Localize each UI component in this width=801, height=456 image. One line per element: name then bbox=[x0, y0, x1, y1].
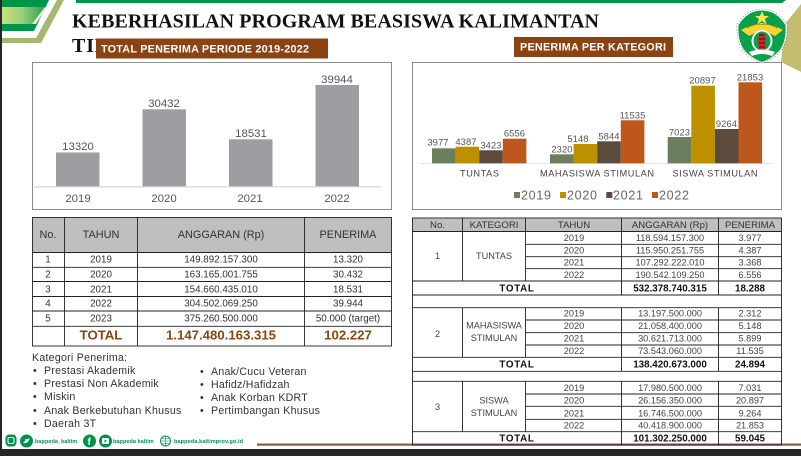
table: budget and recipients per category: 2019 bbox=[564, 233, 584, 243]
table: budget and recipients per category: 18.288 bbox=[735, 284, 766, 294]
text block: recipient categories: Daerah 3T bbox=[44, 418, 97, 430]
table: budget and recipients per category: 26.156.350.000 bbox=[638, 396, 702, 406]
table: budget and recipients per category: 2 bbox=[435, 329, 440, 339]
table: budget and recipients per category: 59.045 bbox=[735, 434, 766, 444]
table: budget and recipients per year: 2021 bbox=[90, 284, 112, 296]
table: budget and recipients per year: 2022 bbox=[90, 298, 112, 310]
bar chart: recipients per category: 6556 bbox=[504, 128, 525, 138]
heading: penerima per kategori bbox=[514, 37, 673, 57]
bar chart: total recipients per year: 2019 bbox=[65, 193, 91, 205]
table: budget and recipients per category: 532.378.740.315 bbox=[633, 284, 707, 294]
text block: recipient categories: • bbox=[200, 392, 204, 404]
table: budget and recipients per category: 5.148 bbox=[738, 321, 762, 331]
bar chart: recipients per category: 11535 bbox=[620, 110, 645, 120]
table: budget and recipients per category: 2022 bbox=[564, 270, 584, 280]
title: TIMUR bbox=[72, 35, 145, 57]
table: budget and recipients per category: 2022 bbox=[564, 420, 584, 430]
table: budget and recipients per category: 5.899 bbox=[738, 334, 762, 344]
table: budget and recipients per category: MAHASISWA bbox=[466, 320, 523, 330]
top right corner decoration bbox=[781, 4, 801, 72]
table: budget and recipients per year: 50.000 (target) bbox=[316, 314, 380, 324]
bar chart: recipients per category: 2020 bbox=[567, 188, 597, 202]
table: budget and recipients per category: ANGGARAN (Rp) bbox=[632, 220, 708, 231]
bar chart: total recipients per year: 2020 bbox=[151, 193, 177, 205]
text block: recipient categories: Anak/Cucu Veteran bbox=[211, 366, 307, 378]
table: budget and recipients per category: SISWA bbox=[479, 396, 509, 406]
bar chart: recipients per category: 2019 bbox=[521, 188, 551, 202]
table: budget and recipients per category: 2019 bbox=[564, 308, 584, 318]
table: budget and recipients per category: 30.621.713.000 bbox=[638, 334, 702, 344]
bar chart: total recipients per year: 30432 bbox=[148, 98, 180, 110]
table: budget and recipients per category: 2020 bbox=[564, 321, 584, 331]
bar chart: total recipients per year bbox=[32, 62, 392, 210]
top left corner decoration bbox=[2, 0, 64, 43]
table: budget and recipients per year: 304.502.069.250 bbox=[184, 298, 258, 310]
table: budget and recipients per year: 4 bbox=[45, 298, 51, 310]
table: budget and recipients per category: 2020 bbox=[564, 246, 584, 256]
bar chart: recipients per category: 7023 bbox=[669, 126, 690, 138]
table: budget and recipients per category: 3 bbox=[435, 402, 440, 412]
table: budget and recipients per category: 40.418.900.000 bbox=[638, 420, 702, 430]
table: budget and recipients per category: 16.746.500.000 bbox=[638, 408, 702, 418]
table: budget and recipients per year: 1 bbox=[45, 254, 51, 266]
dark bottom edge bbox=[0, 449, 801, 456]
table: budget and recipients per year: 30.432 bbox=[333, 270, 363, 280]
table: budget and recipients per category: 24.894 bbox=[735, 360, 766, 370]
table: budget and recipients per category: 11.535 bbox=[736, 346, 764, 356]
heading: total penerima: TOTAL PENERIMA PERIODE 2019-2022 bbox=[101, 43, 309, 55]
title bbox=[72, 10, 600, 57]
table: budget and recipients per category: 1 bbox=[435, 251, 440, 261]
bar chart: total recipients per year: 2022 bbox=[324, 193, 350, 205]
table: budget and recipients per year: 375.260.500.000 bbox=[184, 314, 258, 324]
table: budget and recipients per category: No. bbox=[430, 220, 445, 231]
bar chart: recipients per category: SISWA STIMULAN bbox=[672, 168, 758, 178]
table: budget and recipients per year: 5 bbox=[45, 314, 51, 324]
text block: recipient categories: • bbox=[200, 366, 204, 378]
table: budget and recipients per year: 149.892.157.300 bbox=[184, 254, 258, 266]
table: budget and recipients per category: 2021 bbox=[564, 408, 584, 418]
table: budget and recipients per year: 2020 bbox=[90, 270, 112, 280]
table: budget and recipients per category: TOTAL bbox=[499, 434, 535, 444]
text block: recipient categories: Anak Berkebutuhan Khusus bbox=[44, 405, 182, 417]
title: KEBERHASILAN PROGRAM BEASISWA KALIMANTAN bbox=[72, 10, 600, 32]
text block: recipient categories: Kategori Penerima: bbox=[32, 352, 127, 364]
bar chart: recipients per category: 3977 bbox=[427, 136, 449, 148]
table: budget and recipients per category: 21.058.400.000 bbox=[638, 321, 702, 331]
text block: recipient categories: Pertimbangan Khusus bbox=[211, 405, 320, 417]
bar chart: recipients per category: 9264 bbox=[716, 118, 737, 129]
bar chart: total recipients per year: 18531 bbox=[235, 128, 267, 140]
table: budget and recipients per category: STIMULAN bbox=[471, 333, 517, 343]
table: budget and recipients per category: 13.197.500.000 bbox=[638, 308, 702, 318]
text block: recipient categories bbox=[32, 352, 320, 430]
text block: recipient categories: • bbox=[33, 378, 37, 390]
table: budget and recipients per category: 138.420.673.000 bbox=[633, 360, 707, 370]
table: budget and recipients per year: TOTAL bbox=[80, 328, 122, 342]
table: budget and recipients per category: 2020 bbox=[564, 396, 584, 406]
table: budget and recipients per category: TUNTAS bbox=[476, 251, 512, 261]
table: budget and recipients per category: 20.897 bbox=[736, 396, 764, 406]
table: budget and recipients per category: 17.980.500.000 bbox=[638, 383, 702, 393]
table: budget and recipients per category: 107.292.222.010 bbox=[636, 258, 704, 268]
bar chart: recipients per category: 2021 bbox=[613, 188, 643, 202]
bar chart: recipients per category: 4387 bbox=[455, 136, 477, 147]
text block: recipient categories: • bbox=[33, 405, 37, 417]
table: budget and recipients per year bbox=[32, 218, 392, 346]
table: budget and recipients per category: 9.264 bbox=[738, 408, 762, 418]
table: budget and recipients per year: 102.227 bbox=[324, 328, 372, 342]
bar chart: recipients per category: 3423 bbox=[480, 140, 502, 150]
text block: recipient categories: • bbox=[200, 379, 204, 391]
table: budget and recipients per category: 21.853 bbox=[736, 420, 764, 430]
table: budget and recipients per category: 190.542.109.250 bbox=[636, 270, 704, 280]
bottom brown line bbox=[257, 444, 801, 446]
footer: social media links: f bbox=[88, 437, 92, 448]
bar chart: recipients per category: 5148 bbox=[567, 133, 589, 144]
table: budget and recipients per category: 2022 bbox=[564, 346, 584, 356]
table: budget and recipients per category: 6.556 bbox=[738, 270, 762, 280]
table: budget and recipients per category bbox=[412, 218, 782, 445]
bar chart: recipients per category: 20897 bbox=[689, 74, 716, 86]
text block: recipient categories: Hafidz/Hafidzah bbox=[211, 379, 290, 391]
table: budget and recipients per category: 2021 bbox=[564, 258, 584, 268]
bar chart: recipients per category bbox=[412, 62, 782, 210]
text block: recipient categories: Miskin bbox=[44, 391, 76, 403]
table: budget and recipients per category: 101.302.250.000 bbox=[633, 434, 707, 444]
text block: recipient categories: • bbox=[200, 405, 204, 417]
footer: social media links: bappeda kaltim bbox=[113, 439, 154, 445]
table: budget and recipients per year: 3 bbox=[45, 284, 51, 296]
table: budget and recipients per year: PENERIMA bbox=[320, 229, 377, 241]
table: budget and recipients per category: 115.950.251.755 bbox=[636, 246, 704, 256]
footer: social media links: bappeda.kaltimprov.go.id bbox=[174, 439, 244, 445]
bar chart: total recipients per year: 2021 bbox=[237, 193, 263, 205]
heading: penerima per kategori: PENERIMA PER KATEGORI bbox=[520, 42, 666, 54]
dark left edge bbox=[0, 0, 2, 456]
table: budget and recipients per category: 73.543.060.000 bbox=[638, 346, 702, 356]
table: budget and recipients per year: 13.320 bbox=[333, 254, 364, 266]
bar chart: recipients per category: 21853 bbox=[737, 72, 763, 82]
table: budget and recipients per category: TAHUN bbox=[558, 220, 590, 231]
text block: recipient categories: • bbox=[33, 365, 37, 377]
table: budget and recipients per category: STIMULAN bbox=[471, 408, 517, 418]
table: budget and recipients per year: No. bbox=[40, 229, 56, 241]
bar chart: total recipients per year: 39944 bbox=[321, 74, 353, 86]
table: budget and recipients per category: 3.977 bbox=[738, 233, 762, 243]
table: budget and recipients per category: 2019 bbox=[564, 383, 584, 393]
table: budget and recipients per year: TAHUN bbox=[83, 229, 119, 241]
footer: social media links: bappeda_kaltim bbox=[35, 439, 77, 445]
table: budget and recipients per category: 7.031 bbox=[738, 383, 762, 393]
bar chart: recipients per category: TUNTAS bbox=[460, 168, 499, 178]
text block: recipient categories: • bbox=[33, 418, 37, 430]
table: budget and recipients per year: ANGGARAN (Rp) bbox=[178, 229, 264, 241]
table: budget and recipients per year: 1.147.480.163.315 bbox=[166, 328, 276, 342]
table: budget and recipients per category: KATEGORI bbox=[470, 220, 518, 231]
heading: total penerima bbox=[96, 38, 328, 58]
table: budget and recipients per year: 39.944 bbox=[333, 298, 364, 310]
footer: social media links bbox=[6, 434, 244, 448]
table: budget and recipients per category: PENERIMA bbox=[725, 220, 776, 231]
icon: kalimantan timur emblem bbox=[737, 9, 787, 63]
table: budget and recipients per year: 18.531 bbox=[333, 284, 363, 296]
bar chart: recipients per category: 5844 bbox=[598, 130, 620, 142]
table: budget and recipients per category: TOTAL bbox=[499, 284, 535, 294]
table: budget and recipients per year: 2023 bbox=[90, 314, 112, 324]
table: budget and recipients per year: 2 bbox=[45, 270, 51, 280]
bar chart: recipients per category: MAHASISWA STIMULAN bbox=[540, 168, 654, 178]
text block: recipient categories: • bbox=[33, 391, 37, 403]
table: budget and recipients per category: 2.312 bbox=[738, 308, 762, 318]
table: budget and recipients per year: 2019 bbox=[90, 254, 112, 266]
bar chart: recipients per category: 2022 bbox=[659, 188, 689, 202]
table: budget and recipients per year: 154.660.435.010 bbox=[184, 284, 258, 296]
table: budget and recipients per category: 4.387 bbox=[738, 246, 762, 256]
table: budget and recipients per category: 118.594.157.300 bbox=[636, 233, 704, 243]
table: budget and recipients per category: 3.368 bbox=[738, 258, 762, 268]
table: budget and recipients per year: 163.165.001.755 bbox=[184, 270, 258, 280]
bar chart: total recipients per year: 13320 bbox=[62, 141, 94, 153]
text block: recipient categories: Prestasi Akademik bbox=[44, 365, 136, 377]
table: budget and recipients per category: 2021 bbox=[564, 334, 584, 344]
top green bar bbox=[76, 0, 786, 3]
table: budget and recipients per category: TOTAL bbox=[499, 360, 535, 370]
text block: recipient categories: Prestasi Non Akademik bbox=[44, 378, 159, 390]
bar chart: recipients per category: 2320 bbox=[551, 144, 573, 154]
text block: recipient categories: Anak Korban KDRT bbox=[211, 392, 308, 404]
